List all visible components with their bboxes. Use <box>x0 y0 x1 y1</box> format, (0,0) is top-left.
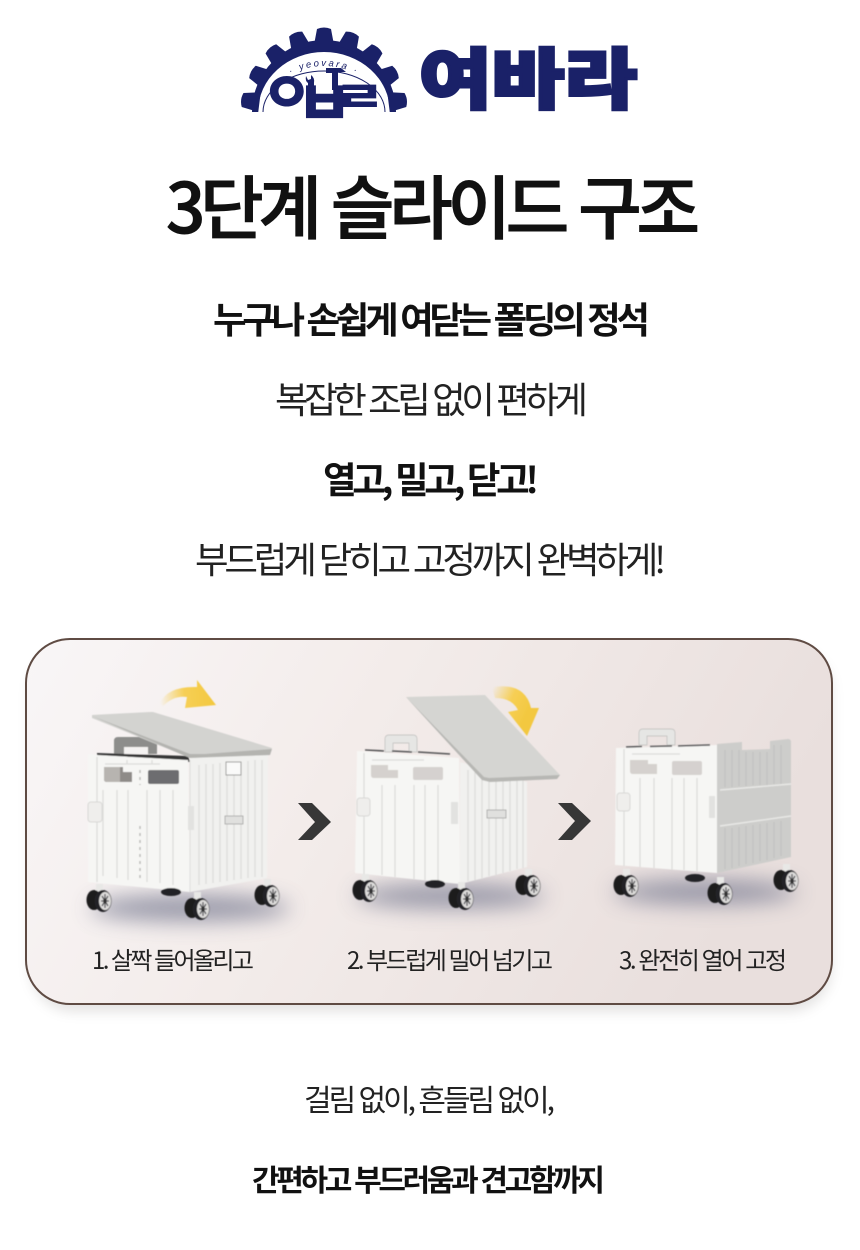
icon: yellow arrow 1 <box>160 680 216 708</box>
text block: intro copy: 열고, 밀고, 닫고! <box>323 451 539 504</box>
text block: intro copy: 누구나 손쉽게 여닫는 폴딩의 정석 <box>213 291 650 344</box>
step 2: cart with lid sliding <box>352 686 560 910</box>
logo emblem letters: ㅇ <box>261 49 313 130</box>
icon: hammer and wrench <box>306 68 346 92</box>
caption: step 3: 3. 완전히 열어 고정 <box>619 941 787 976</box>
logo emblem letters <box>261 49 386 144</box>
logo <box>241 27 638 144</box>
text block: closing copy <box>252 1076 605 1200</box>
step 3: cart fully open <box>614 729 798 905</box>
panel: three-step slide <box>26 639 832 1012</box>
title: 3단계 슬라이드 구조 <box>166 153 700 253</box>
text block: intro copy: 부드럽게 닫히고 고정까지 완벽하게! <box>195 531 666 584</box>
icon: gear emblem <box>241 28 407 144</box>
arrow: chevron 2 <box>558 803 591 840</box>
logo emblem letters: ㅂ <box>296 54 353 144</box>
text block: closing copy: 걸림 없이, 흔들림 없이, <box>304 1076 555 1120</box>
logo small wordmark: · yeovara · <box>290 61 356 72</box>
arrow: chevron 1 <box>298 803 331 840</box>
caption: step 1: 1. 살짝 들어올리고 <box>92 941 254 976</box>
text block: intro copy <box>195 291 666 584</box>
logo wordmark: 여바라 <box>419 27 637 123</box>
step 1: cart with lid lifted <box>86 680 280 920</box>
caption: step 2: 2. 부드럽게 밀어 넘기고 <box>347 941 553 976</box>
logo emblem letters: ㄹ <box>334 64 386 125</box>
ground shadows <box>90 880 797 921</box>
text block: intro copy: 복잡한 조립 없이 편하게 <box>275 371 588 424</box>
text block: closing copy: 간편하고 부드러움과 견고함까지 <box>252 1156 605 1200</box>
icon: yellow arrow 2 <box>492 686 539 736</box>
